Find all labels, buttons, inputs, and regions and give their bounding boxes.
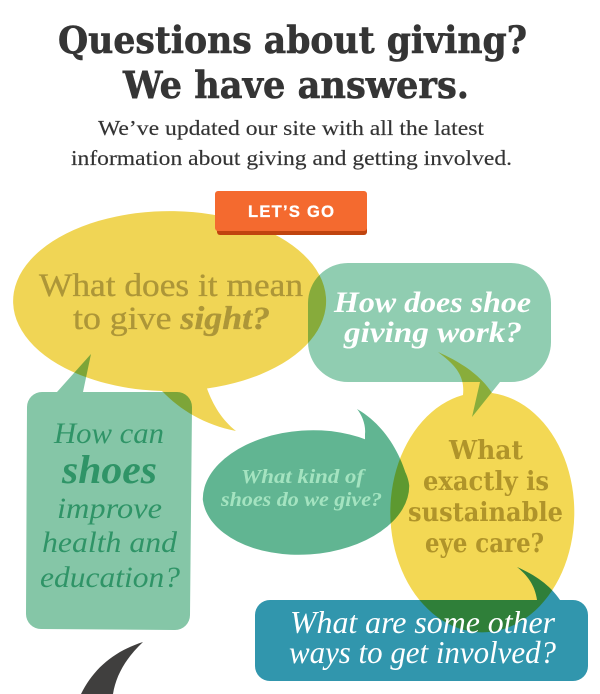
panel: blue speech bubble, get involved: What are some other (290, 604, 556, 640)
button: let's go: LET’S GO (248, 203, 334, 221)
panel: teal speech bubble, shoe giving: How does shoe (333, 286, 531, 319)
panel: left green speech bubble, health and education: improve (57, 492, 162, 525)
title: Questions about giving? (58, 18, 527, 62)
button: let's go (215, 191, 367, 235)
subtitle text: information about giving and getting involved. (71, 146, 512, 170)
panel: green speech bubble, kinds of shoes (203, 409, 409, 555)
panel: left green speech bubble, health and education: health and (42, 526, 178, 559)
panel: green speech bubble, kinds of shoes: What kind of (241, 466, 367, 488)
panel: yellow speech bubble, give sight: What does it mean (39, 268, 303, 304)
subtitle text: We’ve updated our site with all the latest (98, 116, 484, 140)
title: We have answers. (122, 63, 469, 107)
panel: left green speech bubble, health and education (26, 354, 192, 630)
panel: blue speech bubble, get involved (255, 567, 588, 681)
panel: yellow speech bubble, sustainable eye care: sustainable (408, 498, 563, 528)
icon: dark speech bubble tail (81, 642, 143, 694)
panel: yellow speech bubble, give sight (13, 211, 326, 431)
panel: left green speech bubble, health and education: shoes (61, 447, 157, 492)
panel: yellow speech bubble, sustainable eye care: What (448, 436, 523, 466)
panel: blue speech bubble, get involved: ways to get involved? (289, 634, 556, 670)
title (58, 18, 527, 107)
panel: yellow speech bubble, give sight: to give sight? (73, 301, 270, 337)
panel: left green speech bubble, health and education: How can (53, 417, 164, 450)
subtitle text (71, 116, 512, 170)
panel: left green speech bubble, health and education: education? (40, 561, 180, 594)
panel: yellow speech bubble, sustainable eye care (390, 352, 574, 632)
panel: teal speech bubble, shoe giving (308, 263, 551, 417)
panel: teal speech bubble, shoe giving: giving work? (343, 316, 522, 349)
panel: green speech bubble, kinds of shoes: shoes do we give? (220, 489, 382, 511)
panel: yellow speech bubble, sustainable eye care: eye care? (425, 529, 544, 559)
panel: yellow speech bubble, sustainable eye care: exactly is (423, 467, 549, 497)
